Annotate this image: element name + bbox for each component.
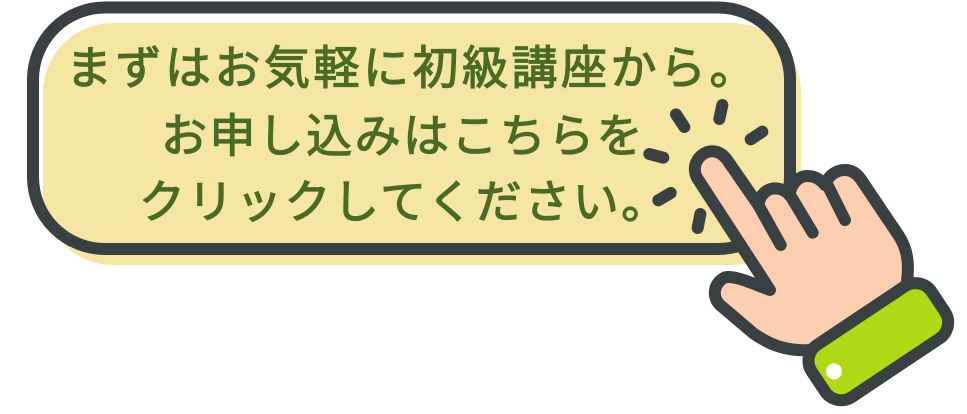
text line 3: クリックしてください。 — [139, 176, 670, 228]
cuff button — [826, 363, 842, 379]
text line 2: お申し込みはこちらを — [161, 110, 645, 162]
cuff — [801, 276, 956, 408]
click spark lines — [649, 105, 762, 228]
text: call to action — [66, 42, 759, 228]
finger separator lines — [758, 187, 845, 245]
text line 1: まずはお気軽に初級講座から。 — [66, 42, 759, 94]
hand shape — [695, 151, 908, 350]
button: yellow fill — [43, 23, 801, 265]
button: dark outline — [33, 8, 790, 249]
icon: pointing hand — [649, 105, 956, 408]
